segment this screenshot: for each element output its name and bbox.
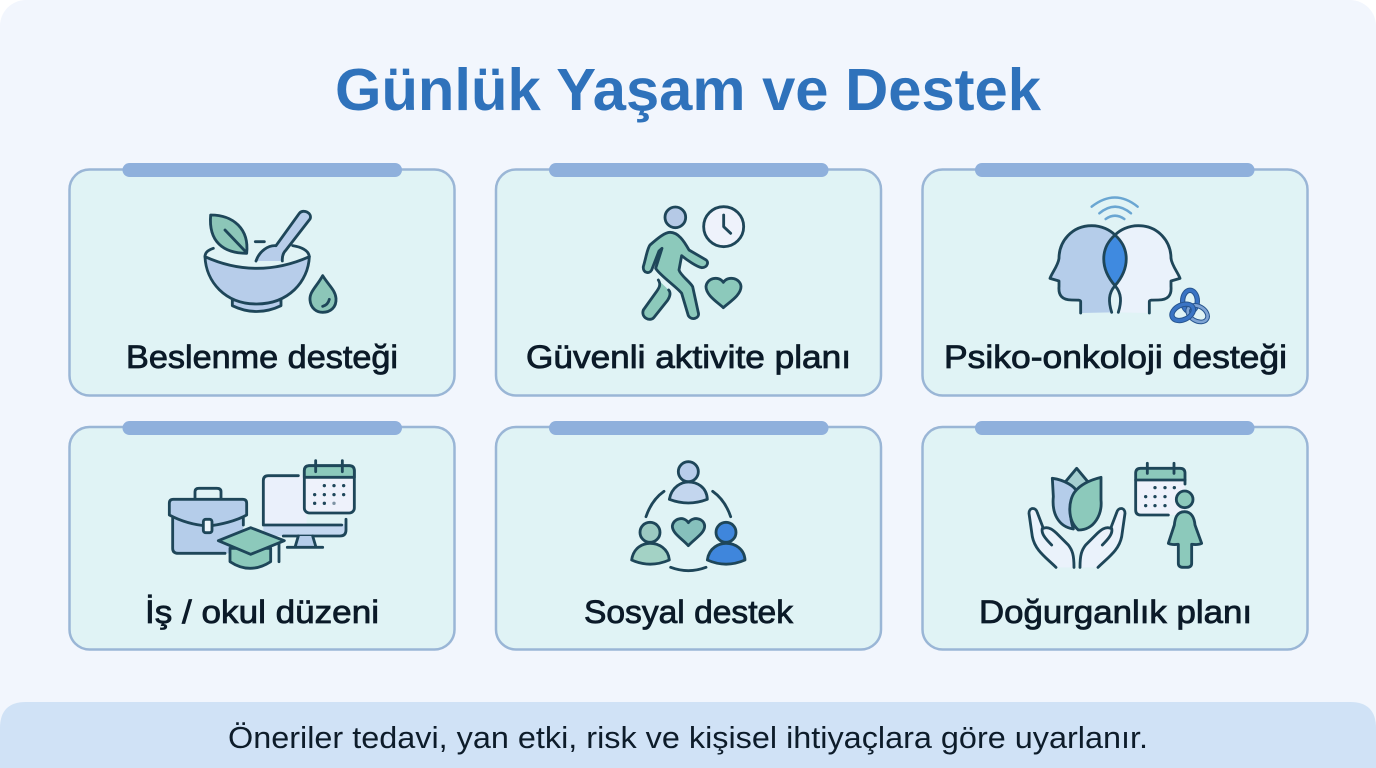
icon: walking person, clock and heart [643,207,744,319]
label: Beslenme desteği [126,339,398,375]
icon: two heads, signal and knot [1050,197,1211,325]
label: Güvenli aktivite planı [526,339,851,375]
label: Doğurganlık planı [979,594,1252,630]
panel: fertility plan [922,421,1308,650]
footer bar [0,702,1376,768]
panel: social support [496,421,881,650]
panel: nutrition support [70,163,454,396]
panel: safe activity plan [496,163,881,396]
footer note: Öneriler tedavi, yan etki, risk ve kişisel ihtiyaçlara göre uyarlanır. [228,720,1148,755]
icon: briefcase, monitor, calendar and graduation cap [169,461,354,568]
panel: work and school routine [70,421,454,650]
icon: tulip in hands, calendar and person [1029,463,1202,567]
label: Psiko-onkoloji desteği [944,339,1287,375]
title: Günlük Yaşam ve Destek [335,57,1041,123]
icon: bowl with leaf, spoon and drop [205,211,336,312]
label: İş / okul düzeni [145,594,379,630]
panel: psycho-oncology support [922,163,1308,396]
icon: three people around a heart [632,462,745,571]
label: Sosyal destek [584,594,794,630]
